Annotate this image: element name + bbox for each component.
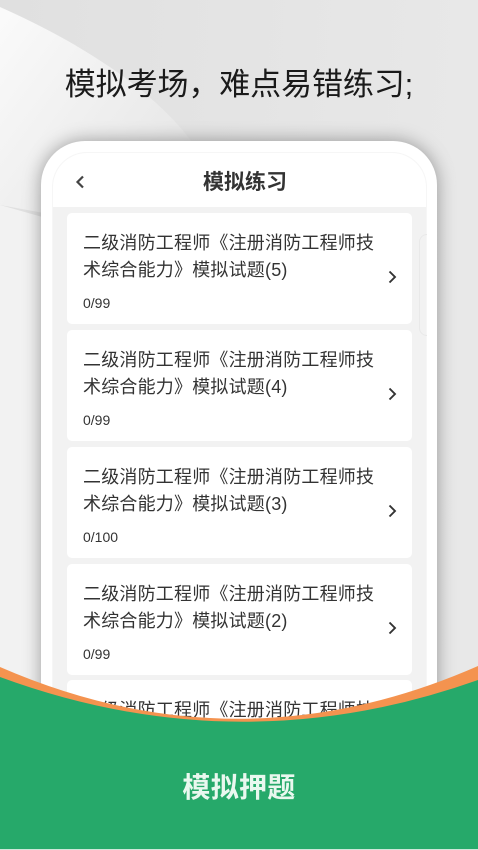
list card 1 partially hidden [67, 680, 412, 740]
list card 4: 0/99 [83, 412, 110, 428]
list card 4: 二级消防工程师《注册消防工程师技 [83, 350, 374, 370]
list card 3: 二级消防工程师《注册消防工程师技 [83, 467, 374, 487]
list card 2: 术综合能力》模拟试题(2) [83, 611, 288, 631]
list card 2 [67, 564, 412, 675]
icon: back arrow [76, 176, 84, 188]
icon: chevron [388, 388, 396, 400]
bottom green curved band [0, 666, 478, 850]
list card 5 [67, 213, 412, 324]
icon: chevron [388, 504, 396, 518]
list card 5: 二级消防工程师《注册消防工程师技 [83, 233, 374, 253]
list card 4 [67, 330, 412, 441]
app header [53, 153, 426, 207]
list card 2: 0/99 [83, 646, 110, 662]
list card 5: 0/99 [83, 295, 110, 311]
phone screen [53, 153, 426, 850]
phone mockup [41, 141, 437, 850]
icon: chevron [388, 270, 396, 284]
list card 1 partially hidden: 二级消防工程师《注册消防工程师技 [83, 700, 374, 720]
header title: 模拟练习 [203, 171, 287, 194]
icon: chevron [388, 622, 396, 634]
list card 4: 术综合能力》模拟试题(4) [83, 377, 288, 397]
list card 3: 术综合能力》模拟试题(3) [83, 494, 288, 514]
title: 模拟考场，难点易错练习; [65, 67, 413, 102]
list card 3: 0/100 [83, 529, 118, 545]
list card 5: 术综合能力》模拟试题(5) [83, 260, 288, 280]
side handle [419, 234, 427, 336]
list card 3 [67, 447, 412, 558]
bottom label: 模拟押题 [182, 772, 296, 803]
list card 2: 二级消防工程师《注册消防工程师技 [83, 584, 374, 604]
